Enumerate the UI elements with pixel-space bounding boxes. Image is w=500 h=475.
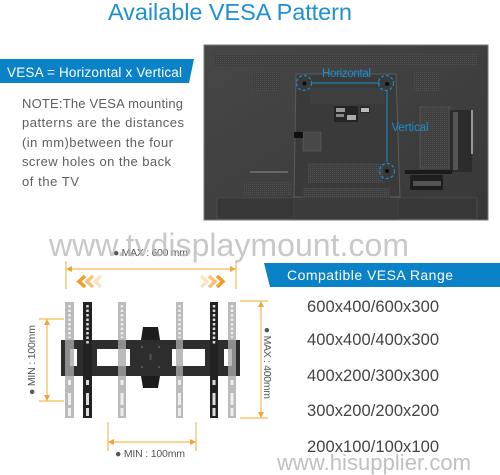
label sticker: [334, 106, 370, 122]
horizontal measurement: Horizontal: [322, 68, 371, 80]
VESA size list: [307, 298, 439, 456]
horizontal measurement: [312, 68, 380, 83]
icon: left chevrons: [79, 276, 101, 287]
VESA size list: 300x200/200x200: [307, 402, 439, 420]
vertical measurement: Vertical: [392, 122, 428, 134]
dark rail: right: [210, 302, 218, 418]
note text: (in mm)between the four: [22, 135, 174, 150]
dimension: max height: ● MAX : 400mm: [261, 327, 273, 399]
watermark: supplier: www.hisupplier.com: [276, 450, 471, 475]
VESA size list: 200x100/100x100: [307, 438, 439, 456]
VESA size list: 600x400/600x300: [307, 298, 439, 316]
screw hole: top left: [296, 76, 312, 90]
dimension: min height: [26, 319, 64, 401]
note text: NOTE:The VESA mounting: [22, 96, 183, 111]
VESA size list: 400x200/300x300: [307, 367, 439, 385]
note text: screw holes on the back: [22, 154, 172, 169]
dark rail: left: [83, 302, 92, 418]
grey rails: [65, 302, 236, 418]
note text: of the TV: [22, 174, 79, 189]
watermark: site: www.tvdisplaymount.com: [48, 227, 409, 263]
note text: patterns are the distances: [22, 115, 184, 130]
banner: compatible range: Compatible VESA Range: [287, 267, 453, 283]
VESA size list: 400x400/400x300: [307, 331, 439, 349]
dimension: min height: ● MIN : 100mm: [26, 325, 38, 395]
note text: [22, 96, 184, 189]
vertical measurement: [387, 91, 428, 162]
mount diagram: [61, 302, 240, 418]
dimension: max width: ● MAX : 600 mm: [113, 247, 188, 259]
icon: right chevrons: [201, 276, 223, 287]
crossbar: [61, 327, 240, 388]
connector panel: [405, 107, 473, 190]
photo: back of TV: [204, 45, 488, 220]
screw hole: bottom right: [380, 164, 394, 178]
dimension: min width: [108, 422, 196, 460]
dimension: min width: ● MIN : 100mm: [115, 448, 185, 460]
dimension: max width: [66, 247, 236, 289]
banner: VESA formula: VESA = Horizontal x Vertical: [7, 65, 182, 80]
banner: compatible range: [264, 263, 500, 287]
dimension: max height: [240, 301, 273, 418]
banner: VESA formula: [0, 59, 194, 83]
screw hole: top right: [378, 76, 394, 90]
